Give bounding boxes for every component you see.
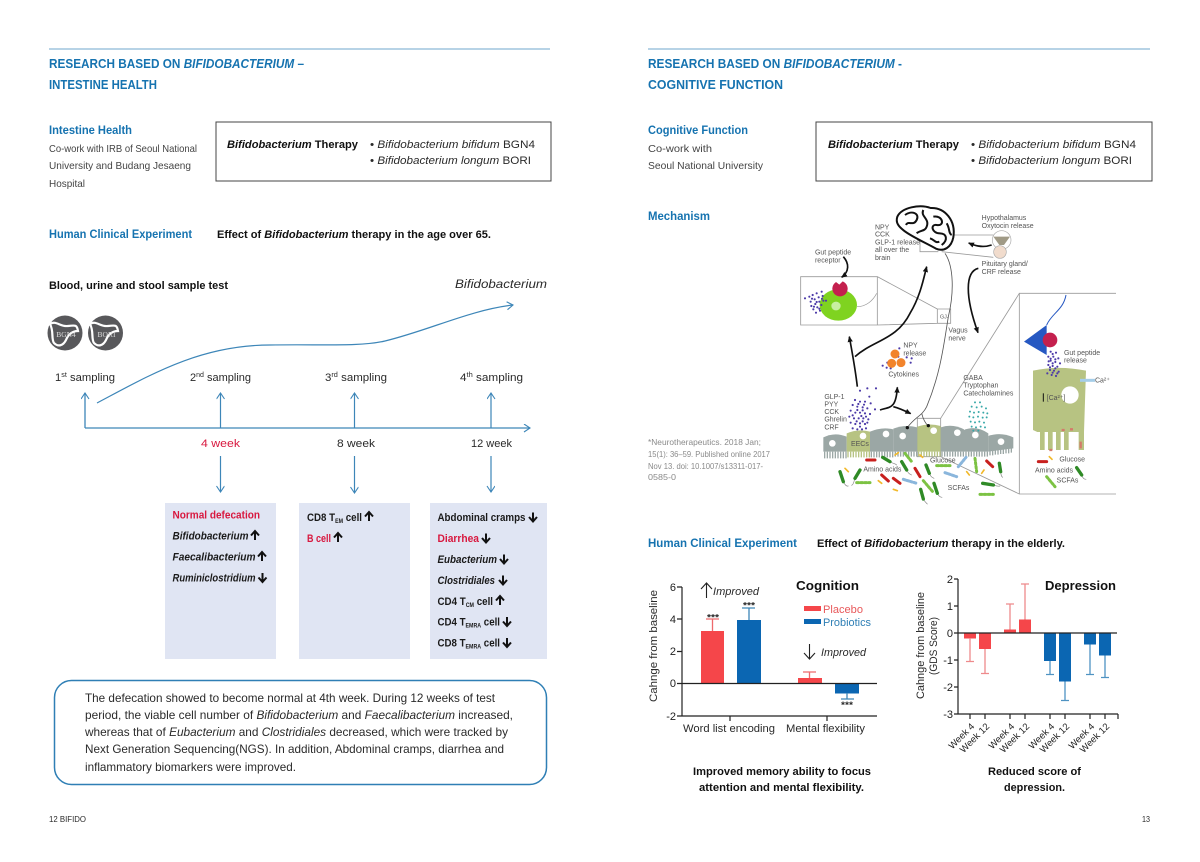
diagram labels: Hypothalamus	[982, 215, 1027, 222]
chart: depression bars: 1	[947, 601, 953, 613]
callout: summary: Next Generation Sequencing(NGS). In addition, Abdominal cramps, diarrhea and	[85, 742, 504, 756]
heading: human clinical experiment	[49, 229, 491, 241]
diagram labels: Amino acids	[1035, 468, 1074, 475]
text block: cognitive function co-work: Cognitive Function	[648, 125, 748, 137]
icon: trend arrows	[334, 512, 373, 542]
diagram labels: CCK	[875, 232, 890, 239]
callout: summary: inflammatory biomarkers were improved.	[85, 760, 296, 774]
icon: BGN4: BGN4	[56, 330, 76, 339]
text block: citation	[648, 437, 770, 482]
diagram labels: Glucose	[1059, 457, 1085, 464]
chart: depression bars: Week 4	[1027, 721, 1057, 752]
text block: cognitive function co-work: Co-work with	[648, 143, 712, 155]
enlarged cell	[1024, 295, 1095, 450]
text block: cognitive function co-work	[648, 125, 764, 172]
chart: sampling timeline: 2	[190, 372, 196, 384]
panel: bifidobacterium therapy: • Bifidobacterium bifidum BGN4	[971, 139, 1136, 151]
chart: sampling timeline: sampling	[204, 372, 251, 384]
text block: citation: 0585-0	[648, 472, 676, 482]
chart: cognition bars: 0	[670, 678, 676, 690]
chart: depression bars: Week 4	[947, 721, 977, 752]
diagram labels: Gut peptide	[1064, 350, 1100, 357]
title: cognitive function	[648, 57, 902, 92]
caption: cognition result: Improved memory ability to focus	[693, 766, 871, 778]
chart: sampling timeline: 1	[55, 372, 61, 384]
callout: summary: period, the viable cell number of Bifidobacterium and Faecalibacterium increased,	[85, 708, 513, 722]
panel: 12 week results	[430, 503, 547, 659]
panel: 12 week results: Abdominal cramps	[438, 512, 526, 524]
diagram labels: Cytokines	[888, 372, 920, 379]
panel: 12 week results: Clostridiales	[438, 575, 495, 587]
panel: 4 week results: Bifidobacterium	[172, 530, 249, 542]
chart: depression bars: Week 12	[1038, 721, 1072, 756]
chart: depression bars	[915, 574, 1118, 756]
diagram labels: [Ca²⁺]	[1047, 395, 1066, 402]
text block: intestine health co-work: Intestine Health	[49, 125, 132, 137]
chart: depression bars: -2	[943, 682, 953, 694]
chart: cognition bars: ***	[841, 700, 854, 710]
purple peptide dots	[805, 292, 1060, 429]
panel: bifidobacterium therapy: • Bifidobacterium longum BORI	[971, 155, 1132, 167]
title: intestine health: RESEARCH BASED ON BIFIDOBACTERIUM –	[49, 57, 304, 71]
chart: sampling timeline: 3	[325, 372, 331, 384]
text block: citation: Nov 13. doi: 10.1007/s13311-017-	[648, 461, 763, 471]
diagram labels: GABA	[963, 375, 983, 382]
callout: summary: The defecation showed to become normal at 4th week. During 12 weeks of test	[85, 691, 496, 705]
footer: left page number: 12 BIFIDO	[49, 815, 86, 824]
heading: human clinical experiment	[648, 538, 1065, 550]
panel: 12 week results: cell	[481, 638, 500, 650]
diagram labels: CCK	[824, 409, 839, 416]
panel: 4 week results: Ruminiclostridium	[172, 572, 256, 584]
panel: 8 week results: CD8 T	[307, 512, 339, 524]
title: intestine health: INTESTINE HEALTH	[49, 78, 157, 92]
heading: human clinical experiment: Effect of Bifidobacterium therapy in the elderly.	[817, 538, 1065, 550]
chart: depression bars: -1	[943, 655, 953, 667]
panel: 12 week results: EMRA	[466, 624, 482, 630]
chart: cognition bars: Mental flexibility	[786, 723, 866, 735]
arrows	[842, 243, 992, 414]
chart: depression bars: (GDS Score)	[928, 617, 940, 675]
bacteria and nutrients	[840, 453, 1086, 504]
panel: 8 week results	[299, 503, 410, 659]
caption: cognition result: attention and mental flexibility.	[699, 782, 864, 794]
title: cognitive function: COGNITIVE FUNCTION	[648, 78, 783, 92]
chart: depression bars: Week 12	[1078, 721, 1112, 756]
diagram labels: PYY	[824, 402, 839, 409]
chart: depression bars: 0	[947, 628, 953, 640]
caption: depression result: depression.	[1004, 782, 1065, 794]
icon: BORI: BORI	[98, 330, 116, 339]
page: left, intestine health	[48, 49, 551, 824]
chart: cognition bars: 6	[670, 582, 676, 594]
chart: cognition bars: ***	[743, 600, 756, 610]
panel: 12 week results: CD4 T	[438, 596, 469, 608]
diagram labels: release	[1064, 358, 1087, 365]
chart: sampling timeline: nd	[196, 372, 204, 379]
diagram labels: Glucose	[930, 458, 956, 465]
heading: human clinical experiment: Human Clinical Experiment	[648, 538, 797, 550]
title: cognitive function: RESEARCH BASED ON BIFIDOBACTERIUM -	[648, 57, 902, 71]
chart: depression bars: Depression	[1045, 578, 1116, 593]
diagram labels: Ghrelin	[824, 416, 847, 423]
callout: summary: whereas that of Eubacterium and Clostridiales decreased, which were tracked by	[84, 725, 508, 739]
diagram labels: GJ-	[940, 315, 949, 321]
diagram labels: SCFAs	[948, 485, 970, 492]
icon: BGN4	[48, 316, 82, 350]
diagram labels: Oxytocin release	[982, 223, 1034, 230]
chart: cognition bars: Placebo	[823, 604, 863, 616]
chart: depression bars: Week 12	[998, 721, 1032, 756]
diagram labels: NPY	[875, 224, 890, 231]
panel: bifidobacterium therapy: Bifidobacterium Therapy	[828, 139, 960, 151]
diagram labels: SCFAs	[1057, 478, 1079, 485]
panel: 12 week results: Eubacterium	[438, 554, 497, 566]
gut epithelium	[823, 424, 1013, 458]
panel: 12 week results: cell	[474, 596, 493, 608]
diagram labels: receptor	[815, 257, 841, 264]
diagram labels: release	[903, 350, 926, 357]
diagram labels: Tryptophan	[963, 383, 999, 390]
connector boxes	[801, 235, 1116, 494]
heading: sample test: Blood, urine and stool sample test	[49, 280, 228, 292]
green cell with receptor	[820, 280, 877, 321]
diagram labels: CRF	[824, 424, 839, 431]
diagram labels: NPY	[903, 343, 918, 350]
chart: sampling timeline: sampling	[338, 372, 387, 384]
label: bifidobacterium curve: Bifidobacterium	[455, 277, 547, 291]
panel: bifidobacterium therapy: Bifidobacterium Therapy	[227, 139, 359, 151]
chart: cognition bars: 4	[670, 614, 676, 626]
teal dots	[969, 402, 987, 431]
diagram labels: GLP-1 release	[875, 239, 920, 246]
diagram labels: Amino acids	[863, 467, 902, 474]
diagram labels: nerve	[948, 336, 966, 343]
chart: sampling timeline: rd	[331, 372, 338, 379]
text block: citation: *Neurotherapeutics. 2018 Jan;	[648, 437, 761, 447]
icon: hypothalamus and pituitary	[992, 231, 1011, 258]
panel: 8 week results: cell	[343, 512, 362, 524]
chart: sampling timeline: sampling	[473, 372, 523, 384]
orange cytokines	[892, 354, 901, 363]
chart: cognition bars: Cahnge from baseline	[648, 590, 660, 702]
text block: intestine health co-work	[49, 125, 197, 190]
text block: intestine health co-work: University and Budang Jesaeng	[49, 160, 191, 172]
chart: sampling timeline: st	[61, 372, 67, 379]
chart: depression bars: Week 12	[958, 721, 992, 756]
chart: depression bars: Week 4	[987, 721, 1017, 752]
panel: 8 week results: B cell	[307, 533, 331, 545]
page: right, cognitive function	[648, 49, 1152, 824]
diagram labels: Ca²⁺	[1095, 378, 1110, 385]
heading: mechanism: Mechanism	[648, 211, 710, 223]
panel: 4 week results: Normal defecation	[172, 510, 260, 522]
chart: sampling timeline: 4 week	[201, 438, 241, 450]
diagram labels: Vagus	[948, 328, 968, 335]
panel: bifidobacterium therapy	[816, 122, 1152, 181]
diagram: gut-brain mechanism	[801, 206, 1116, 504]
chart: sampling timeline: sampling	[67, 372, 115, 384]
chart: cognition bars: Improved	[821, 647, 867, 659]
text block: citation: 15(1): 36–59. Published online 2017	[648, 449, 770, 459]
icon: brain	[897, 206, 954, 250]
heading: human clinical experiment: Effect of Bifidobacterium therapy in the age over 65.	[217, 229, 491, 241]
panel: 4 week results	[165, 503, 276, 659]
text block: intestine health co-work: Hospital	[49, 178, 85, 190]
icon: BORI	[88, 316, 123, 350]
chart: depression bars: Week 4	[1067, 721, 1097, 752]
chart: sampling timeline: th	[467, 372, 473, 379]
chart: cognition bars: 2	[670, 646, 676, 658]
vagus nerve	[907, 253, 952, 428]
icon: trend arrows	[482, 512, 537, 647]
caption: depression result: Reduced score of	[988, 766, 1081, 778]
panel: 8 week results: EM	[335, 519, 343, 525]
diagram labels: Pituitary gland/	[982, 261, 1028, 268]
text block: cognitive function co-work: Seoul National University	[648, 160, 764, 172]
panel: 12 week results: CD8 T	[438, 638, 469, 650]
chart: depression bars: -3	[943, 709, 953, 721]
panel: 12 week results: CM	[466, 603, 474, 609]
chart: cognition bars: ***	[707, 612, 720, 622]
text block: intestine health co-work: Co-work with IRB of Seoul National	[49, 143, 197, 155]
title: intestine health	[49, 57, 304, 92]
chart: cognition bars: Word list encoding	[683, 723, 775, 735]
diagram labels: GLP-1	[824, 394, 845, 401]
callout: summary	[54, 680, 546, 784]
icon: trend arrows	[251, 531, 266, 582]
panel: 4 week results: Faecalibacterium	[172, 552, 256, 564]
chart: cognition bars: Improved	[713, 586, 760, 598]
diagram labels: Gut peptide	[815, 249, 851, 256]
panel: bifidobacterium therapy: • Bifidobacterium longum BORI	[370, 155, 531, 167]
panel: bifidobacterium therapy	[216, 122, 551, 181]
chart: sampling timeline: 12 week	[471, 438, 512, 450]
chart: depression bars: 2	[947, 574, 953, 586]
chart: cognition bars: Probiotics	[823, 617, 871, 629]
chart: sampling timeline: 8 week	[337, 438, 376, 450]
diagram labels: EECs	[851, 441, 869, 448]
caption: depression result	[988, 766, 1081, 794]
arrow: bifidobacterium growth curve	[97, 305, 513, 403]
panel: 12 week results: EMRA	[466, 644, 482, 650]
diagram labels: Catecholamines	[963, 391, 1014, 398]
chart: depression bars: Cahnge from baseline	[915, 592, 927, 699]
diagram labels: all over the	[875, 247, 909, 254]
diagram labels: brain	[875, 255, 891, 262]
chart: cognition bars: -2	[666, 711, 676, 723]
heading: human clinical experiment: Human Clinical Experiment	[49, 229, 192, 241]
panel: 12 week results: cell	[481, 616, 500, 628]
diagram labels	[815, 215, 1110, 492]
panel: 12 week results: CD4 T	[438, 616, 469, 628]
chart: cognition bars: Cognition	[796, 578, 859, 593]
panel: 12 week results: Diarrhea	[438, 533, 480, 545]
chart: sampling timeline	[55, 372, 530, 493]
diagram labels: CRF release	[982, 269, 1021, 276]
caption: cognition result	[693, 766, 871, 794]
chart: cognition bars	[648, 578, 877, 735]
chart: sampling timeline: 4	[460, 372, 466, 384]
panel: bifidobacterium therapy: • Bifidobacterium bifidum BGN4	[370, 139, 535, 151]
footer: right page number: 13	[1142, 815, 1150, 824]
